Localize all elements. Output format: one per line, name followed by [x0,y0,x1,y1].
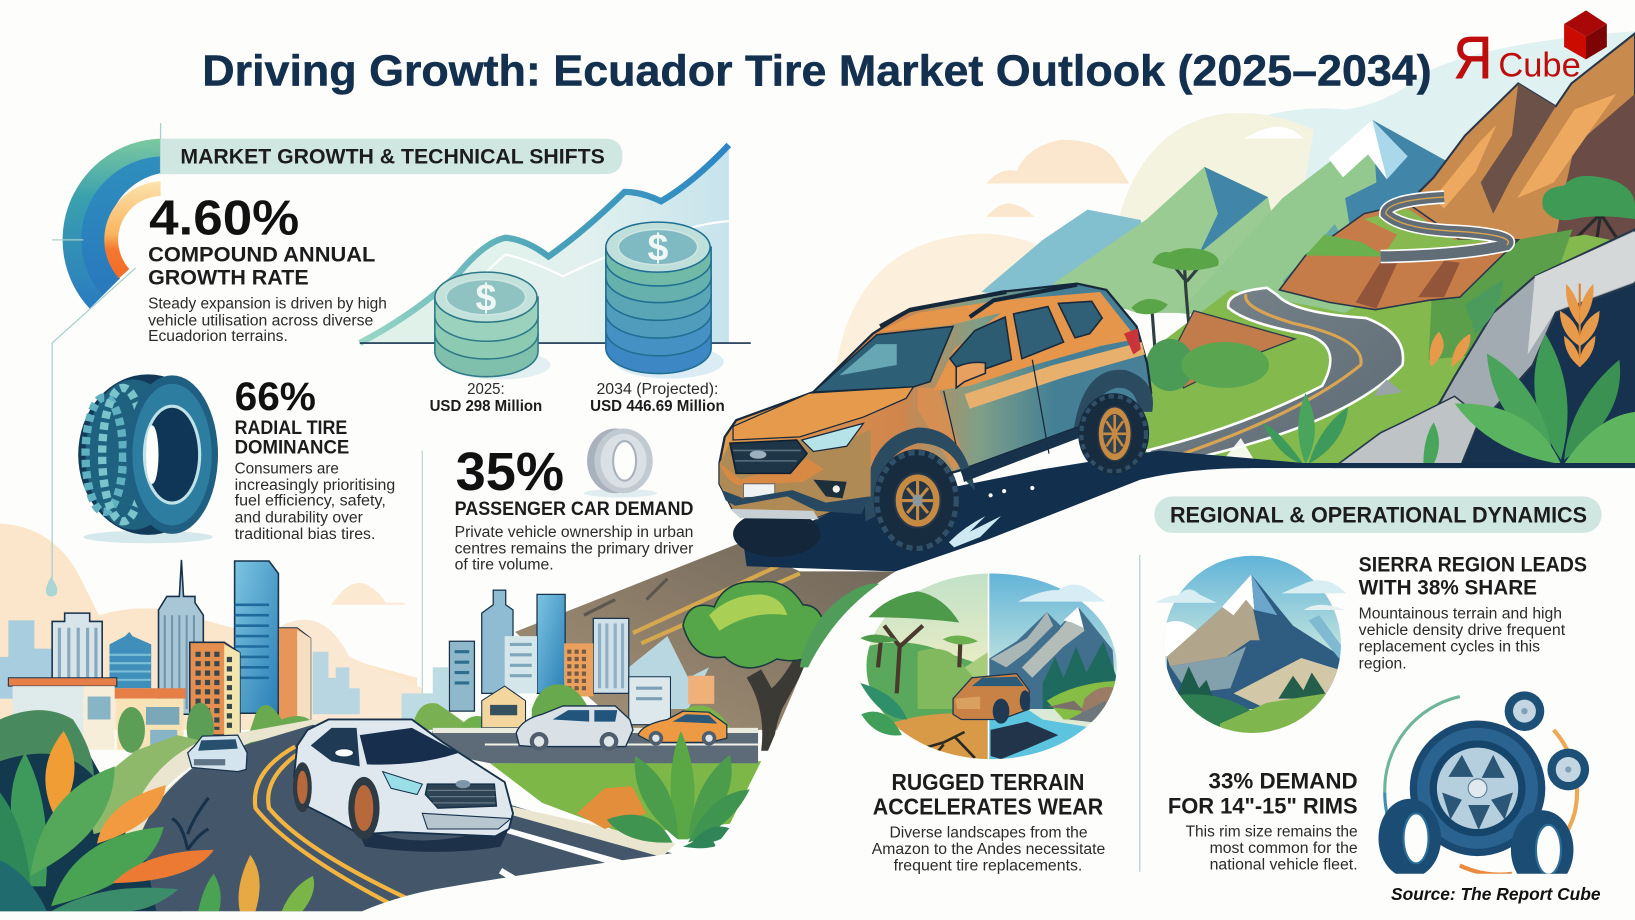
side window band [965,342,1145,409]
stat: radial tire dominance: increasingly prioritising [235,477,395,494]
stat: radial tire dominance: 66% [235,375,316,419]
stat: rugged terrain: frequent tire replacements. [894,858,1082,875]
ground [894,713,988,760]
green hillside [1131,235,1635,468]
illustration: mountain landscape [832,31,1635,468]
tower: low left [52,613,102,680]
logo: RCube [1454,10,1607,91]
right skyline [482,590,513,693]
windshield [813,326,953,392]
far mountains [981,210,1157,313]
icon: mountain circle [1155,553,1346,740]
title: Driving Growth: Ecuador Tire Market Outlook (2025–2034) [202,47,1432,96]
icon: tire and rim [1378,691,1589,889]
stat: rugged terrain: RUGGED TERRAIN [892,769,1084,795]
main road [141,725,678,911]
low buildings [8,678,117,686]
winding road lower [1147,288,1403,464]
tower: blue [109,632,151,688]
orange roof band [880,292,1137,391]
sun discs [832,234,1147,417]
near-side front tire [733,511,821,557]
stat: rim demand: This rim size remains the [1186,823,1358,840]
tower: orange [190,642,240,735]
stat: sierra region: Mountainous terrain and high [1359,605,1562,622]
stat: CAGR [148,192,387,345]
clouds [986,140,1129,184]
grille [730,440,807,473]
section heading: MARKET GROWTH & TECHNICAL SHIFTS [180,145,605,169]
stat: passenger car demand: Private vehicle ownership in urban [455,524,693,541]
rear wheel [1078,393,1149,474]
tree [1152,250,1204,355]
stat: passenger car demand: PASSENGER CAR DEMAND [455,498,693,520]
chart: market size growth: $ [475,277,496,319]
stat: rim demand: national vehicle fleet. [1210,857,1358,874]
upper plants [1465,279,1504,334]
icon: terrain circle [860,568,1119,766]
lower tree remnant [800,583,879,667]
logo: RCube: Cube [1498,47,1581,85]
small white car [188,735,247,772]
plants: lower-left leaves [0,731,314,911]
stat: CAGR: GROWTH RATE [148,266,309,290]
stat: passenger car demand: centres remains the primary driver [455,541,693,558]
tower: glass [235,561,278,713]
mountains [989,607,1117,709]
lower bumper [722,490,870,514]
section heading [161,139,623,174]
left peach hills [0,523,417,730]
background pale towers [0,620,52,699]
icon: radial tire [78,374,218,543]
stat: rugged terrain: Amazon to the Andes necessitate [872,841,1105,858]
section heading [1154,496,1602,533]
cliffs [1397,33,1635,271]
mirror [956,362,985,388]
stat: rugged terrain [872,769,1105,875]
illustration: city skyline and road [0,523,826,918]
stat: radial tire dominance: fuel efficiency, safety, [235,493,386,510]
stat: radial tire dominance: traditional bias tires. [235,526,375,543]
winding road upper [1381,197,1508,257]
stat: CAGR: Ecuadorion terrains. [148,328,288,345]
chart: market size growth: 2034 (Projected): [596,381,718,398]
stat: CAGR: 4.60% [149,192,299,246]
pavement [125,719,334,834]
section heading: REGIONAL & OPERATIONAL DYNAMICS [1170,502,1587,527]
hood [733,387,913,440]
tree [683,582,826,751]
stat: sierra region: WITH 38% SHARE [1359,575,1537,599]
stat: passenger car demand: 35% [456,442,564,502]
stat: rim demand: 33% DEMAND [1209,768,1358,793]
stat: radial tire dominance: Consumers are [235,460,339,477]
chart labels: 2025: [467,381,505,398]
illustration: slope under the SUV [515,543,896,730]
car: grey suv [516,706,633,751]
arches [865,428,975,521]
taillight [1124,328,1141,355]
gauge arcs and connector [46,123,161,596]
stat: passenger car demand [455,442,693,573]
stat: CAGR: COMPOUND ANNUAL [148,243,375,267]
side road [428,730,758,763]
roof rails [880,285,1077,326]
tree on cliff [1575,214,1621,250]
plants: lower-right leaves [577,731,750,848]
stat: sierra region: vehicle density drive frequent [1359,622,1566,639]
stat: CAGR: Steady expansion is driven by high [148,296,387,313]
chart: market size growth: $ [648,227,669,269]
logo: RCube: Я [1454,24,1492,91]
headlight [802,423,863,452]
jungle [866,642,974,730]
green bushes [412,703,474,730]
stat: CAGR: vehicle utilisation across diverse [148,312,373,329]
coin stack 2034 [606,222,724,379]
body [719,284,1151,517]
ledge rock face [1279,203,1518,310]
stat: rugged terrain: ACCELERATES WEAR [873,793,1104,819]
stat: rim demand [1168,768,1358,874]
navy backing [1387,282,1635,468]
tower: peach [278,628,311,724]
sky wash [1157,31,1635,313]
stat: radial tire dominance: DOMINANCE [235,437,349,459]
ground: dark road band [743,450,1635,571]
chart: market size growth [360,145,751,415]
river [988,710,1087,760]
stat: radial tire dominance: and durability over [235,509,363,526]
stat: sierra region: replacement cycles in this [1359,639,1540,656]
stat: rim demand: most common for the [1210,840,1358,857]
rocks [1429,229,1635,438]
stat: sierra region [1359,552,1587,672]
panel: regional and operational dynamics [860,496,1602,889]
foliage background [0,711,182,911]
tower: spire [158,560,203,714]
source note: Source: The Report Cube [1391,884,1601,904]
grass [490,761,761,834]
stat: rim demand: FOR 14"-15" RIMS [1168,793,1358,818]
rock small [1374,380,1402,396]
stat: radial tire dominance [235,375,395,543]
stat: sierra region: region. [1359,655,1407,672]
front wheel [874,449,959,552]
stat: passenger car demand: of tire volume. [455,556,554,573]
plate [743,484,775,497]
stat: sierra region: SIERRA REGION LEADS [1359,552,1587,576]
car: orange sedan [638,711,727,746]
icon: passenger car tire [584,429,657,497]
car: white SUV foreground [293,719,513,852]
side skirt [960,426,1084,482]
leaves left [1263,423,1303,464]
lower doors [944,360,1049,482]
splash [949,516,1001,547]
front fascia [719,430,871,517]
chart: market size growth: USD 446.69 Million [590,398,725,415]
stat: radial tire dominance: RADIAL TIRE [235,417,347,439]
white swoop panel [0,468,1635,920]
house [482,686,526,728]
leaves right [1534,334,1568,460]
fog light [813,480,847,498]
cliff greens [1146,339,1194,391]
illustration: SUV [719,284,1153,557]
mini SUV [953,674,1029,719]
panel: market growth and technical shifts [46,123,751,693]
stat: rugged terrain: Diverse landscapes from the [889,824,1088,841]
coin stack 2025 [435,272,551,380]
chart: market size growth: USD 298 Million [430,398,542,415]
side windows [950,317,1011,376]
